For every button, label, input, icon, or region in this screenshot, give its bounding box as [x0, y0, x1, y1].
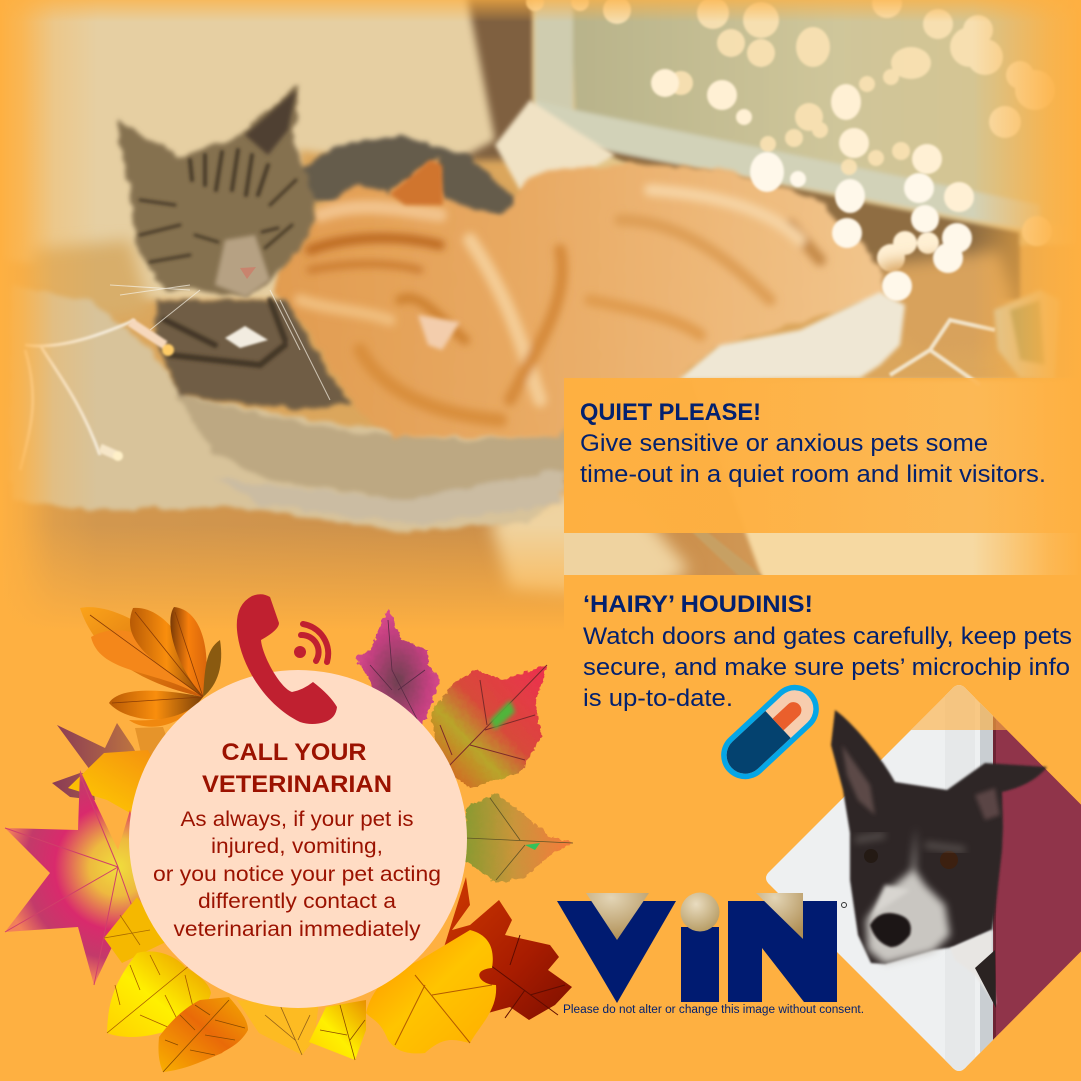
tabby ear shade [245, 90, 296, 155]
text: hairy houdinis body: Watch doors and gates carefully, keep pets [583, 623, 1072, 650]
leaf: orange fan [80, 607, 221, 727]
wooden surface [0, 480, 1081, 640]
tabby head [116, 85, 316, 297]
tabby muzzle [215, 235, 270, 297]
panel: hairy houdinis [564, 575, 1081, 775]
pale knit sock [678, 292, 905, 380]
icon: telephone with signal [237, 594, 337, 724]
white muzzle [866, 827, 950, 964]
bulbs [100, 322, 174, 461]
eyes [864, 849, 878, 863]
heading: hairy houdinis: ‘HAIRY’ HOUDINIS! [583, 591, 813, 618]
tabby stripes [140, 150, 296, 365]
far fur behind [880, 250, 1015, 355]
whiskers [110, 285, 330, 400]
leaf: deep yellow [158, 997, 248, 1072]
nose [870, 913, 911, 947]
text: quiet please body: Give sensitive or anxious pets some [580, 430, 988, 457]
string lights cable [20, 320, 135, 470]
dog [831, 710, 1047, 1008]
text: quiet please body [580, 430, 1046, 488]
leaf: yellow-orange small [68, 750, 170, 813]
lower lights front [750, 152, 972, 301]
ginger cheek tuft [418, 315, 460, 350]
text: hairy houdinis body: is up-to-date. [583, 685, 733, 712]
knitted blanket [10, 285, 565, 532]
heading: call your veterinarian: CALL YOUR [222, 739, 366, 766]
text: hairy houdinis body [583, 623, 1072, 712]
leaf: purple back [52, 723, 150, 800]
ginger cat [271, 157, 885, 437]
inner ears [842, 745, 875, 815]
cream paper surface [690, 380, 1081, 600]
text: call your veterinarian body [153, 807, 441, 941]
text: quiet please body: time-out in a quiet room and limit visitors. [580, 461, 1046, 488]
text: hairy houdinis body: secure, and make sure pets’ microchip info [583, 654, 1070, 681]
leaf: pale yellow [237, 1000, 318, 1055]
photo: two cats on a blanket by a window [0, 0, 1081, 650]
leaf: small orange [135, 727, 175, 770]
dog head and ears [831, 710, 1047, 964]
white chest [950, 930, 996, 1005]
tabby chest patch [225, 326, 268, 348]
text: call your veterinarian body: veterinarian immediately [174, 917, 421, 941]
leaf: yellow bottom [309, 1000, 366, 1060]
far tabby body [295, 135, 520, 220]
leaf: magenta [355, 608, 440, 740]
panel: call your veterinarian [129, 670, 467, 1008]
panel: quiet please [564, 378, 1081, 533]
plant glass [994, 290, 1060, 380]
leaf: oak dark red [440, 877, 572, 1020]
text: call your veterinarian body: As always, if your pet is [180, 807, 414, 831]
grey brows [855, 835, 965, 850]
leaf: red green [431, 665, 547, 788]
heading: call your veterinarian: VETERINARIAN [202, 771, 392, 798]
leaf: yellow back [104, 897, 170, 963]
tabby cat [116, 85, 350, 410]
logo: VIN [557, 892, 846, 1003]
leaf: yellow large [107, 951, 211, 1037]
heading: quiet please: QUIET PLEASE! [580, 399, 761, 426]
pale sock behind [495, 100, 615, 190]
window [532, 0, 1081, 300]
heading: call your veterinarian [202, 739, 392, 798]
photo: dog in diamond [750, 680, 1081, 1080]
text: call your veterinarian body: or you notice your pet acting [153, 862, 441, 886]
door [750, 680, 1081, 1080]
photo edge fades [0, 0, 1081, 650]
cable near glass [890, 320, 995, 385]
leaf: mixed orange green [465, 793, 573, 883]
ginger ear [390, 160, 443, 205]
ginger shading [300, 190, 820, 420]
consent note: Please do not alter or change this image without consent. [563, 1004, 864, 1016]
cushion and room backdrop [0, 0, 1081, 640]
fringe of blanket [490, 490, 690, 600]
text: call your veterinarian body: differently contact a [198, 889, 396, 913]
icon: capsule [711, 675, 829, 789]
text: call your veterinarian body: injured, vomiting, [211, 834, 383, 858]
leaf: gold oak [366, 930, 496, 1053]
leaves wreath [5, 607, 573, 1072]
leaf: star magenta yellow [5, 770, 150, 985]
bokeh lights [526, 0, 1055, 272]
